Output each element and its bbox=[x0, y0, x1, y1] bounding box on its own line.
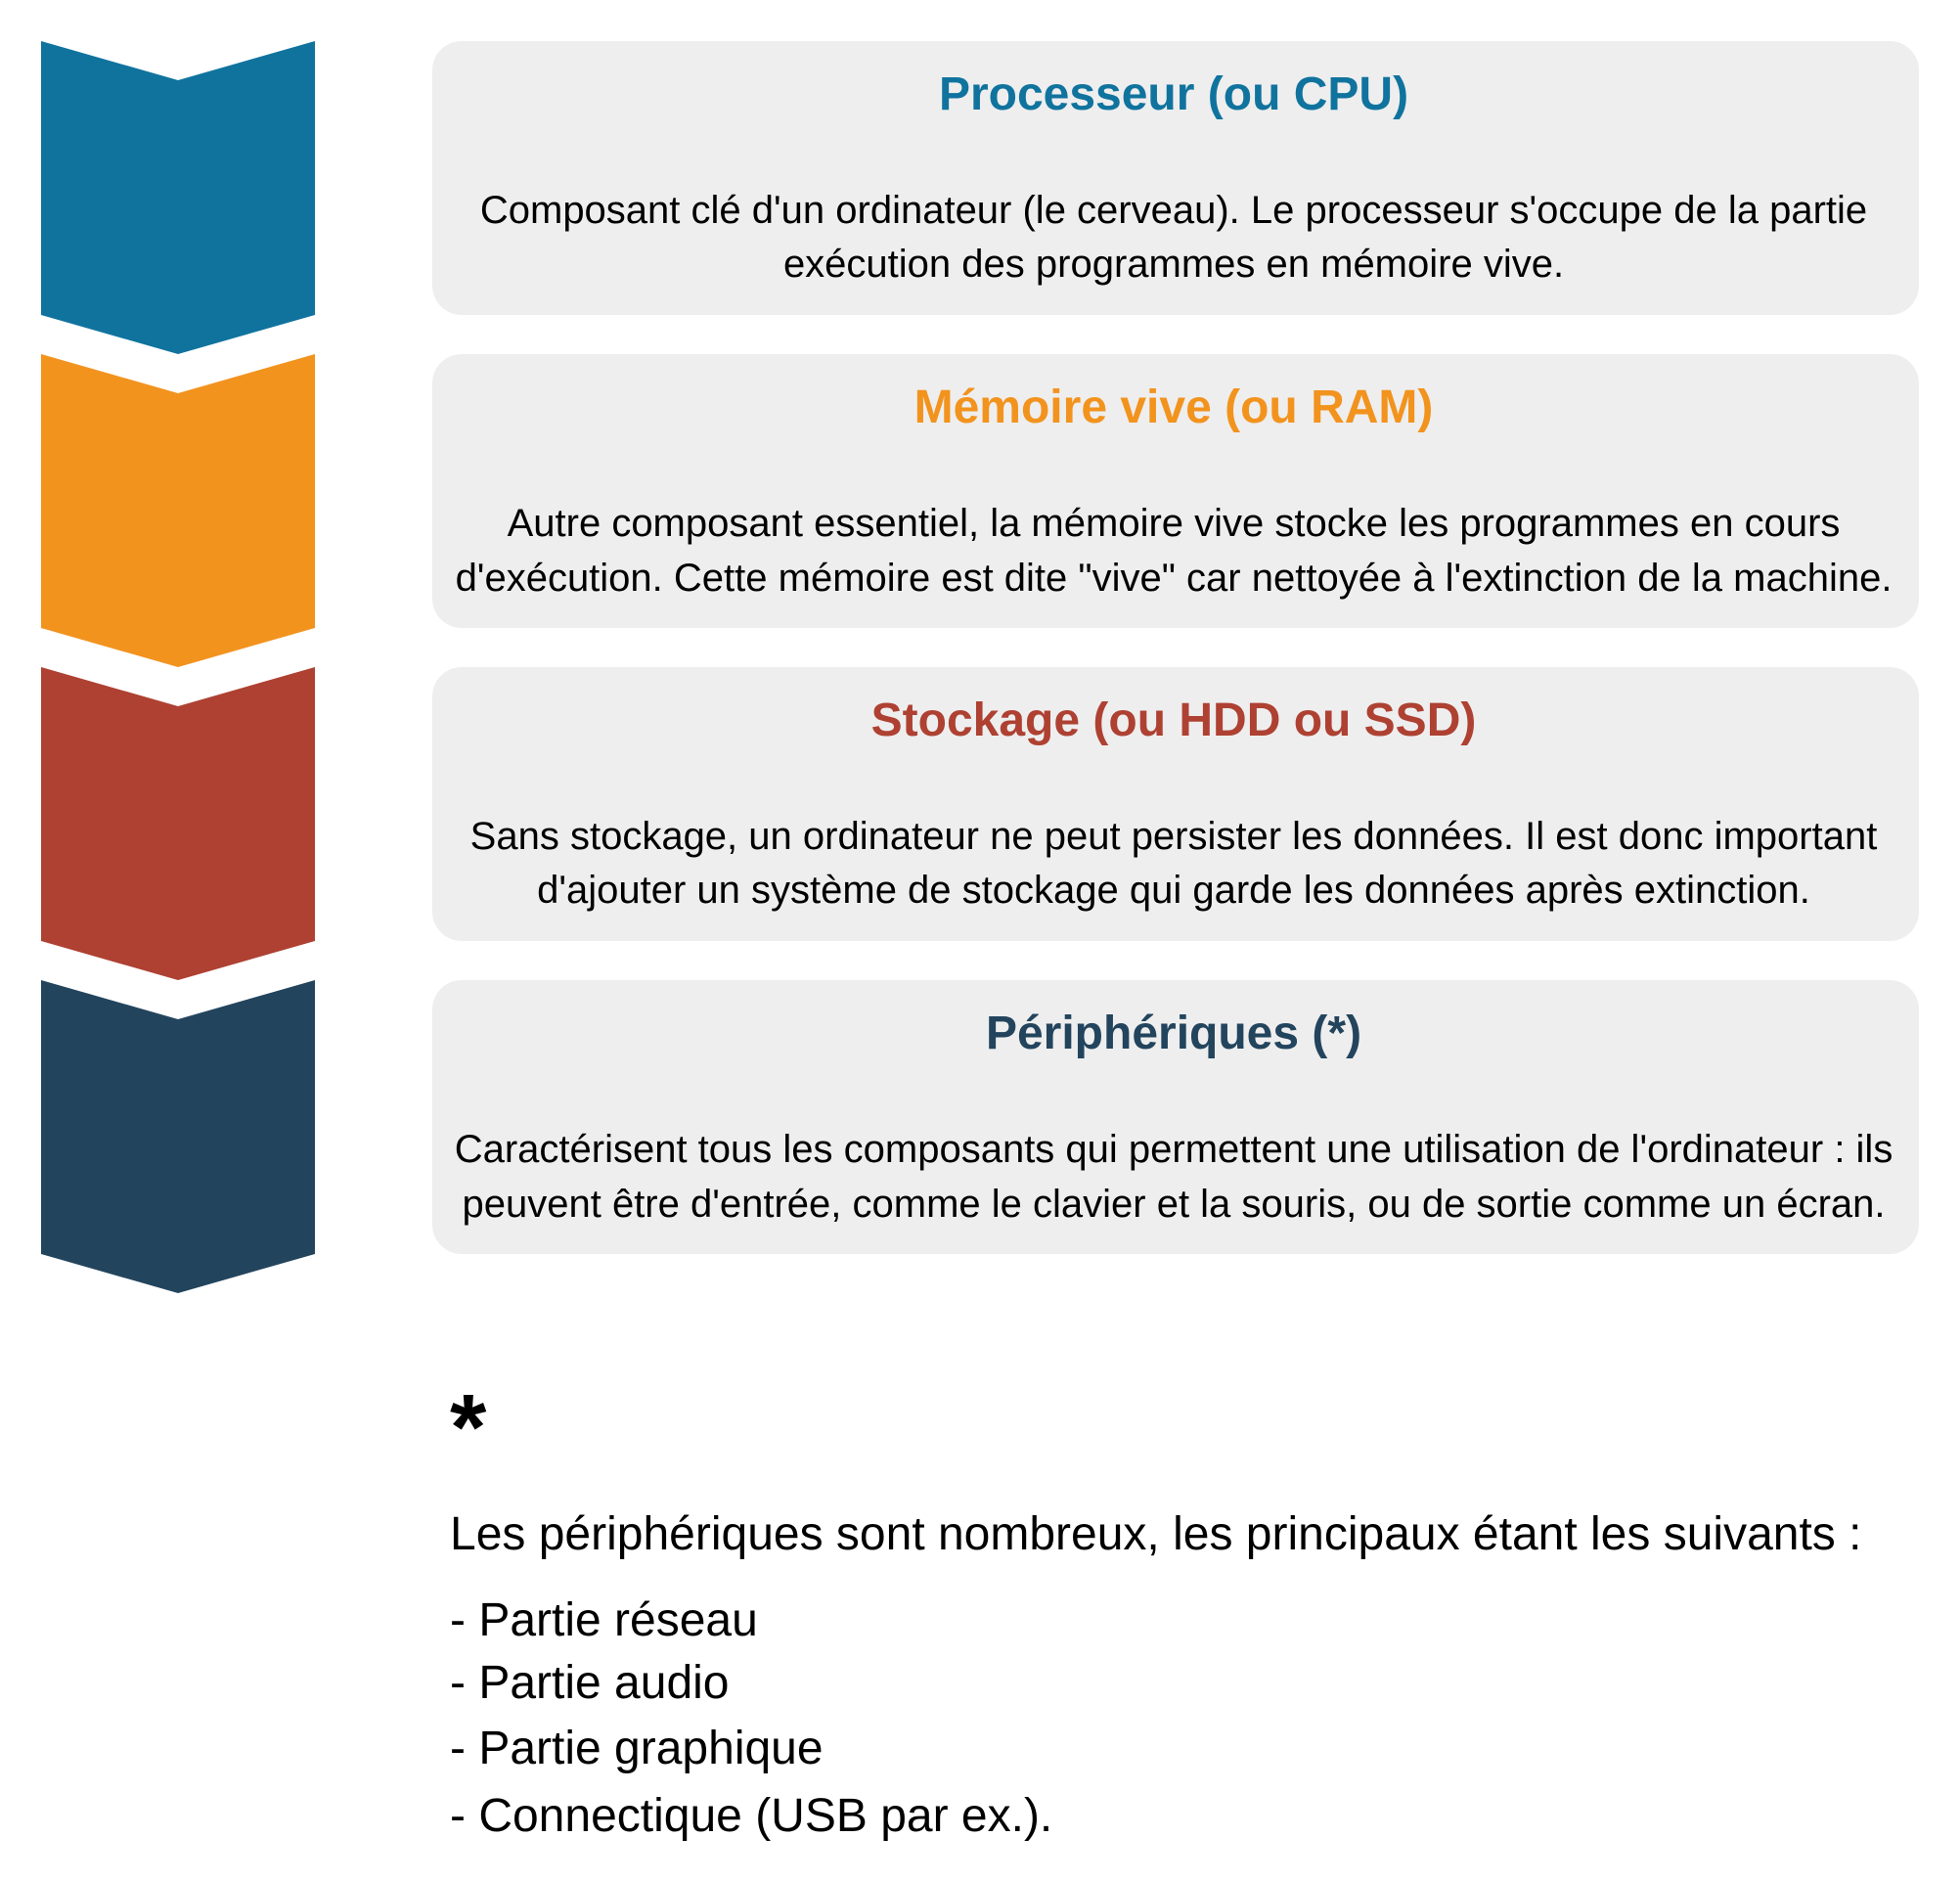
text: description mémoire vive: Autre composant essentiel, la mémoire vive stocke les programmes en cours bbox=[508, 502, 1840, 545]
text: description stockage bbox=[470, 815, 1877, 912]
heading: mémoire vive: Mémoire vive (ou RAM) bbox=[914, 381, 1433, 433]
text: description processeur: Composant clé d'un ordinateur (le cerveau). Le processeur s'occupe de la partie bbox=[480, 189, 1867, 232]
heading: périphériques: Périphériques (*) bbox=[986, 1008, 1361, 1059]
footnote list: - Connectique (USB par ex.). bbox=[450, 1790, 1052, 1842]
footnote list: - Partie graphique bbox=[450, 1723, 824, 1774]
panel: processeur bbox=[432, 41, 1919, 315]
chevron: périphériques bbox=[41, 980, 315, 1293]
text: description périphériques bbox=[455, 1128, 1893, 1226]
text: description processeur bbox=[480, 189, 1867, 286]
footnote asterisk: * bbox=[450, 1375, 487, 1480]
footnote list: - Partie réseau bbox=[450, 1594, 758, 1646]
chevron: mémoire vive bbox=[41, 354, 315, 667]
panel: stockage bbox=[432, 667, 1919, 941]
text: description stockage: d'ajouter un système de stockage qui garde les données après extinction. bbox=[537, 869, 1810, 912]
text: description processeur: exécution des programmes en mémoire vive. bbox=[783, 243, 1564, 286]
text: description périphériques: peuvent être d'entrée, comme le clavier et la souris, ou de sortie comme un écran. bbox=[462, 1183, 1886, 1226]
panel: périphériques bbox=[432, 980, 1919, 1254]
chevron: processeur bbox=[41, 41, 315, 354]
footnote list bbox=[450, 1594, 1052, 1842]
footnote intro text: Les périphériques sont nombreux, les principaux étant les suivants : bbox=[450, 1508, 1861, 1560]
text: description mémoire vive: d'exécution. Cette mémoire est dite "vive" car nettoyée à l'extinction de la machine. bbox=[456, 557, 1892, 600]
heading: stockage: Stockage (ou HDD ou SSD) bbox=[871, 695, 1476, 746]
footnote list: - Partie audio bbox=[450, 1657, 730, 1709]
text: description stockage: Sans stockage, un ordinateur ne peut persister les données. Il est donc important bbox=[470, 815, 1877, 858]
panel: mémoire vive bbox=[432, 354, 1919, 628]
heading: processeur: Processeur (ou CPU) bbox=[939, 68, 1408, 120]
text: description périphériques: Caractérisent tous les composants qui permettent une utilisation de l'ordinateur : ils bbox=[455, 1128, 1893, 1171]
chevron: stockage bbox=[41, 667, 315, 980]
text: description mémoire vive bbox=[456, 502, 1892, 600]
